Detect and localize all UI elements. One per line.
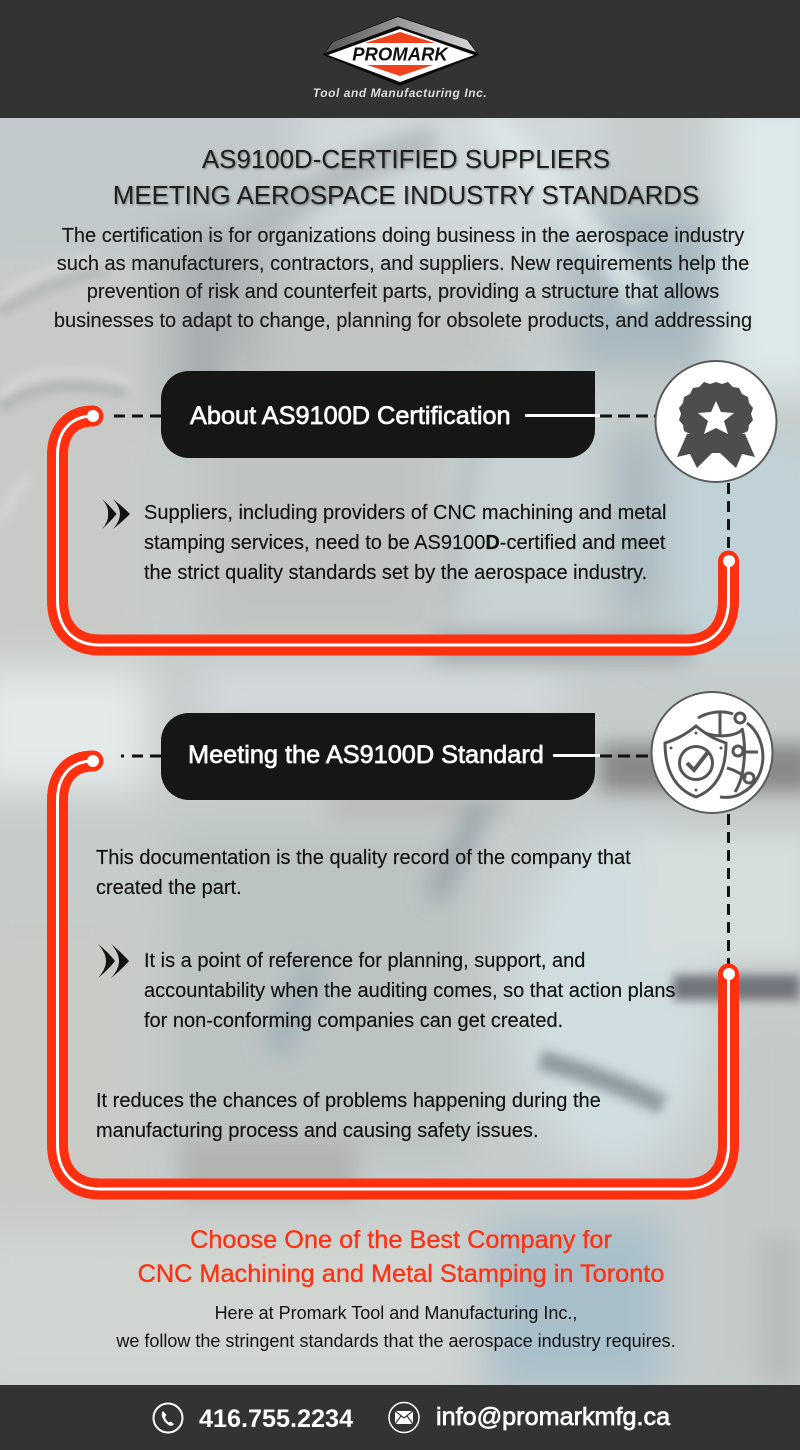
logo [313, 16, 487, 100]
logo: PROMARK [352, 44, 449, 64]
footer bar [0, 1385, 800, 1450]
section 2 text top: This documentation is the quality record of the company that [96, 847, 631, 869]
call to action heading: Choose One of the Best Company for [190, 1226, 612, 1254]
section 2 chevrons [98, 944, 129, 978]
section 1 text: the strict quality standards set by the aerospace industry. [144, 562, 647, 584]
header bar [0, 0, 800, 118]
title: MEETING AEROSPACE INDUSTRY STANDARDS [113, 182, 699, 210]
section 1 text: stamping services, need to be AS9100D-certified and meet [144, 532, 665, 554]
intro text: such as manufacturers, contractors, and suppliers. New requirements help the [57, 253, 749, 275]
section 2 text middle [144, 950, 675, 1032]
call to action heading [138, 1226, 664, 1288]
section 2 text middle: accountability when the auditing comes, so that action plans [144, 980, 675, 1002]
heading pill: meeting: Meeting the AS9100D Standard [188, 741, 544, 769]
section 2 text middle: It is a point of reference for planning, support, and [144, 950, 585, 972]
heading pill: about: About AS9100D Certification [190, 402, 511, 430]
email: info@promarkmfg.ca [436, 1403, 670, 1431]
call to action text [116, 1303, 676, 1351]
intro text: The certification is for organizations doing business in the aerospace industry [62, 224, 744, 246]
phone number: 416.755.2234 [199, 1405, 353, 1433]
section 2 text top: created the part. [96, 877, 242, 899]
call to action text: Here at Promark Tool and Manufacturing Inc., [215, 1303, 577, 1323]
title [113, 146, 700, 210]
section 2 text bottom [96, 1090, 601, 1142]
icon: award badge [654, 360, 778, 483]
section 2 text bottom: It reduces the chances of problems happening during the [96, 1090, 601, 1112]
call to action text: we follow the stringent standards that the aerospace industry requires. [116, 1331, 676, 1351]
logo: Tool and Manufacturing Inc. [313, 86, 487, 100]
intro text [54, 224, 752, 332]
section 2 text top [96, 847, 631, 899]
title: AS9100D-CERTIFIED SUPPLIERS [202, 146, 610, 174]
icon: envelope [388, 1402, 420, 1434]
section 1 text [144, 502, 666, 584]
intro text: prevention of risk and counterfeit parts, providing a structure that allows [87, 281, 719, 303]
icon: shield and globe [650, 691, 774, 814]
section 1 text: Suppliers, including providers of CNC machining and metal [144, 502, 666, 524]
call to action heading: CNC Machining and Metal Stamping in Toronto [138, 1260, 664, 1288]
section 1 chevrons [102, 499, 130, 529]
section 2 text bottom: manufacturing process and causing safety issues. [96, 1120, 538, 1142]
heading pill: meeting [161, 713, 595, 800]
icon: phone [152, 1402, 184, 1434]
heading pill: about [161, 371, 595, 458]
section 2 text middle: for non-conforming companies can get created. [144, 1010, 563, 1032]
intro text: businesses to adapt to change, planning for obsolete products, and addressing [54, 310, 752, 332]
